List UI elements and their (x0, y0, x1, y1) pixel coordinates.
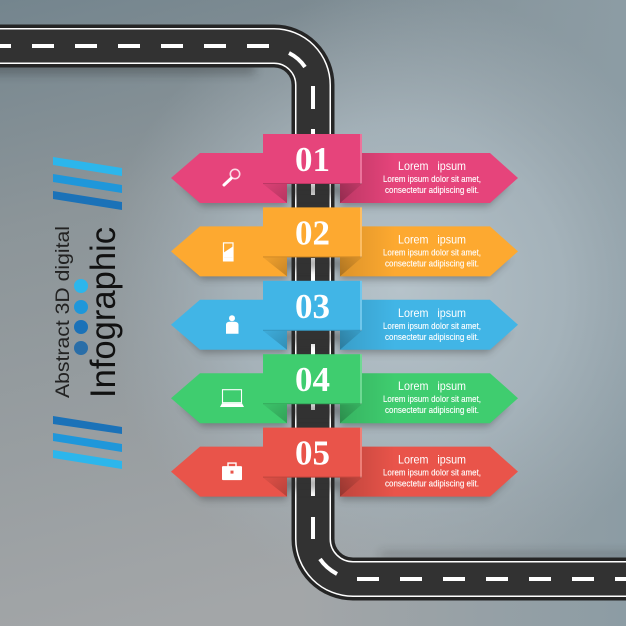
panel: step 04: consectetur adipiscing elit. (385, 405, 479, 415)
panel: step 05: 05 (295, 434, 330, 473)
panel: step 03 (171, 281, 518, 353)
side stripes: bottom (53, 416, 122, 469)
road shadow (0, 68, 626, 555)
panel: step 02: 02 (295, 213, 330, 252)
icon: briefcase (222, 463, 242, 480)
panel: step 05 (171, 428, 518, 500)
title: Infographic (84, 227, 123, 398)
panel: step 02: Lorem ipsum (398, 232, 466, 246)
panel: step 02: Lorem ipsum dolor sit amet, (383, 247, 481, 257)
icon: magnifier (224, 169, 240, 185)
icon: phone (224, 243, 233, 261)
panel: step 03: Lorem ipsum dolor sit amet, (383, 321, 481, 331)
icon: person (226, 315, 238, 334)
panel: step 03: consectetur adipiscing elit. (385, 332, 479, 342)
panel: step 01 (171, 134, 518, 206)
dots (74, 279, 88, 355)
panel: step 03: 03 (295, 287, 330, 326)
side stripes: top (53, 157, 122, 210)
panel: step 01: Lorem ipsum (398, 159, 466, 173)
panel: step 05: consectetur adipiscing elit. (385, 479, 479, 489)
panel: step 04: Lorem ipsum dolor sit amet, (383, 394, 481, 404)
panel: step 05: Lorem ipsum dolor sit amet, (383, 468, 481, 478)
panel: step 04: 04 (295, 360, 330, 399)
panel: step 01: Lorem ipsum dolor sit amet, (383, 174, 481, 184)
panel: step 03: Lorem ipsum (398, 306, 466, 320)
subtitle: Abstract 3D digital (53, 226, 74, 398)
icon: laptop (220, 390, 244, 407)
panel: step 02 (171, 207, 518, 279)
panel: step 02: consectetur adipiscing elit. (385, 258, 479, 268)
panel: step 01: 01 (295, 140, 330, 179)
panel: step 05: Lorem ipsum (398, 453, 466, 467)
panel: step 04 (171, 354, 518, 426)
panel: step 04: Lorem ipsum (398, 379, 466, 393)
panel: step 01: consectetur adipiscing elit. (385, 185, 479, 195)
